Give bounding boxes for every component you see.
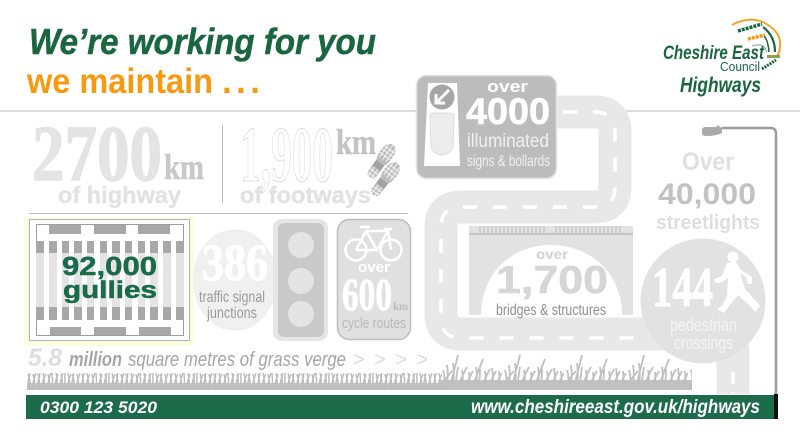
stat: highway: of highway — [58, 182, 181, 208]
panel: cycle routes: km — [393, 299, 408, 313]
panel: gullies — [24, 217, 194, 346]
icon: sign with bollard — [416, 76, 556, 178]
panel: bridges and structures: over — [536, 246, 569, 262]
stat: streetlights: Over — [682, 148, 734, 176]
panel: pedestrian crossings — [640, 238, 766, 364]
stat: streetlights: streetlights — [656, 212, 760, 234]
panel: pedestrian crossings: pedestrian — [670, 315, 737, 335]
panel: bridges and structures: 1,700 — [496, 259, 608, 302]
logo: Highways — [680, 74, 761, 97]
lower divider — [29, 213, 408, 214]
panel: cycle routes — [338, 220, 410, 340]
icon: traffic light — [273, 219, 328, 341]
text: grass verge: square metres of grass verge — [128, 349, 346, 371]
panel: bridges and structures: bridges & structures — [496, 302, 606, 319]
icon: bicycle — [346, 227, 402, 260]
stat: footways: of footways — [240, 182, 371, 208]
panel: cycle routes: over — [358, 259, 390, 276]
divider between stats — [222, 125, 223, 203]
panel: cycle routes: cycle routes — [342, 315, 406, 332]
panel: pedestrian crossings: crossings — [674, 333, 733, 353]
stat: footways: 1,900 — [240, 112, 333, 199]
panel: pedestrian crossings: 144 — [652, 257, 713, 319]
stat: streetlights — [656, 148, 760, 234]
subtitle: . . . — [222, 62, 260, 101]
footer bar — [26, 394, 778, 419]
panel: traffic signal junctions: traffic signal — [199, 289, 265, 306]
icon: sign with bollard: over — [487, 77, 528, 96]
panel: gullies: gullies — [63, 277, 157, 304]
stat: highway: 2700 — [32, 111, 162, 198]
stat: footways: km — [336, 122, 376, 162]
title: We’re working for you — [29, 21, 376, 62]
panel: bridges and structures — [469, 226, 633, 319]
icon: sign with bollard: signs & bollards — [467, 153, 550, 170]
logo — [663, 20, 780, 97]
panel: cycle routes: 600 — [342, 269, 392, 320]
icon: pedestrian — [714, 252, 760, 313]
text: grass verge — [28, 344, 428, 372]
road — [441, 112, 733, 394]
icon: sign with bollard: illuminated — [467, 131, 549, 152]
panel: traffic signal junctions — [193, 229, 277, 331]
header divider — [0, 110, 800, 112]
text: grass verge: 5.8 — [28, 344, 62, 372]
text: grass verge: million — [69, 349, 122, 371]
icon: footprints — [364, 141, 403, 199]
icon: street lamp — [702, 125, 776, 395]
grass — [27, 355, 692, 390]
phone number: 0300 123 5020 — [40, 398, 158, 417]
text: grass verge: > > > > — [353, 349, 428, 371]
panel: gullies: 92,000 — [62, 251, 157, 281]
panel: traffic signal junctions: junctions — [206, 305, 257, 322]
icon: wheat arcs — [732, 20, 780, 69]
stat: highway: km — [164, 147, 204, 187]
logo: Cheshire East — [663, 43, 765, 64]
website: www.cheshireeast.gov.uk/highways — [471, 397, 760, 418]
subtitle: we maintain — [26, 62, 213, 101]
icon: sign with bollard: 4000 — [466, 91, 550, 132]
stat: streetlights: 40,000 — [658, 178, 756, 211]
panel: traffic signal junctions: 386 — [202, 235, 268, 292]
logo: Council — [720, 59, 760, 74]
